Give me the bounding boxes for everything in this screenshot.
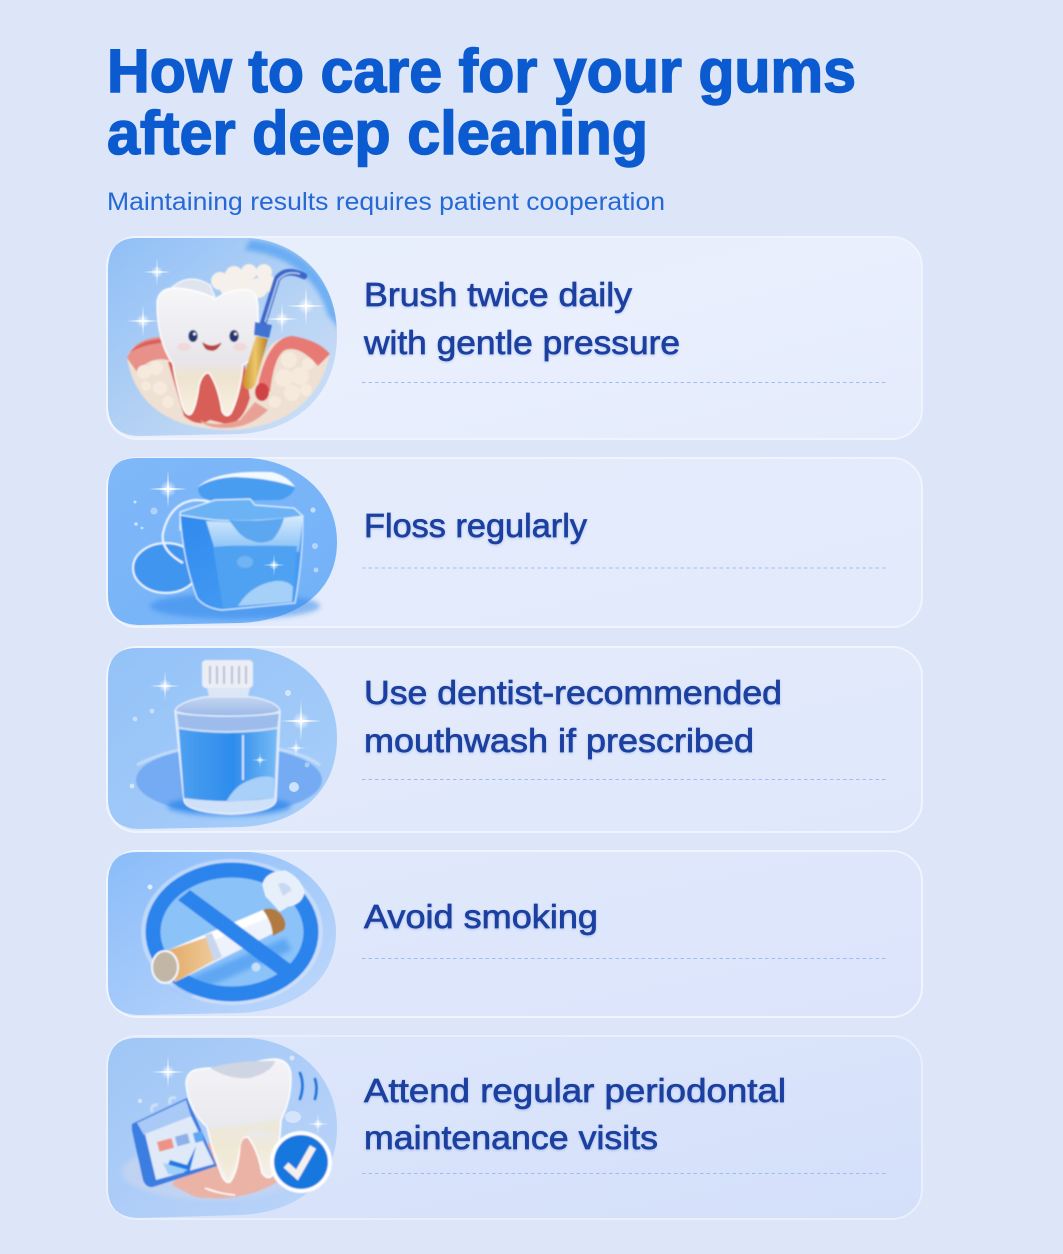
heading: periodontal visits: Attend regular periodontal xyxy=(364,1072,786,1109)
heading: brush twice daily: Brush twice daily xyxy=(364,276,633,313)
icon: tooth with calendar and check xyxy=(108,1038,337,1218)
heading: mouthwash xyxy=(364,674,782,759)
icon: mouthwash bottle xyxy=(108,648,337,829)
heading: mouthwash: Use dentist-recommended xyxy=(364,674,782,711)
sparkles xyxy=(134,470,318,576)
icon: floss box xyxy=(108,458,337,625)
icon: tooth with scaler xyxy=(108,238,340,436)
title: after deep cleaning xyxy=(107,99,648,167)
heading: floss regularly: Floss regularly xyxy=(364,507,588,544)
heading: brush twice daily xyxy=(363,276,680,361)
sparkles xyxy=(130,671,321,792)
heading: avoid smoking: Avoid smoking xyxy=(364,898,598,935)
sparkles xyxy=(138,1056,329,1135)
panel: floss regularly xyxy=(107,458,922,627)
panel: avoid smoking xyxy=(107,851,922,1017)
title: How to care for your gums xyxy=(107,37,856,105)
title xyxy=(107,37,856,167)
heading: periodontal visits: maintenance visits xyxy=(364,1119,658,1156)
heading: periodontal visits xyxy=(364,1072,786,1156)
heading: brush twice daily: with gentle pressure xyxy=(363,324,680,361)
icon: no smoking xyxy=(108,852,336,1015)
heading: mouthwash: mouthwash if prescribed xyxy=(364,722,754,759)
panel: mouthwash xyxy=(107,647,922,832)
sparkles xyxy=(127,258,325,337)
subtitle: Maintaining results requires patient cooperation xyxy=(107,188,665,216)
panel: brush twice daily xyxy=(107,237,922,439)
panel: periodontal visits xyxy=(107,1036,922,1219)
